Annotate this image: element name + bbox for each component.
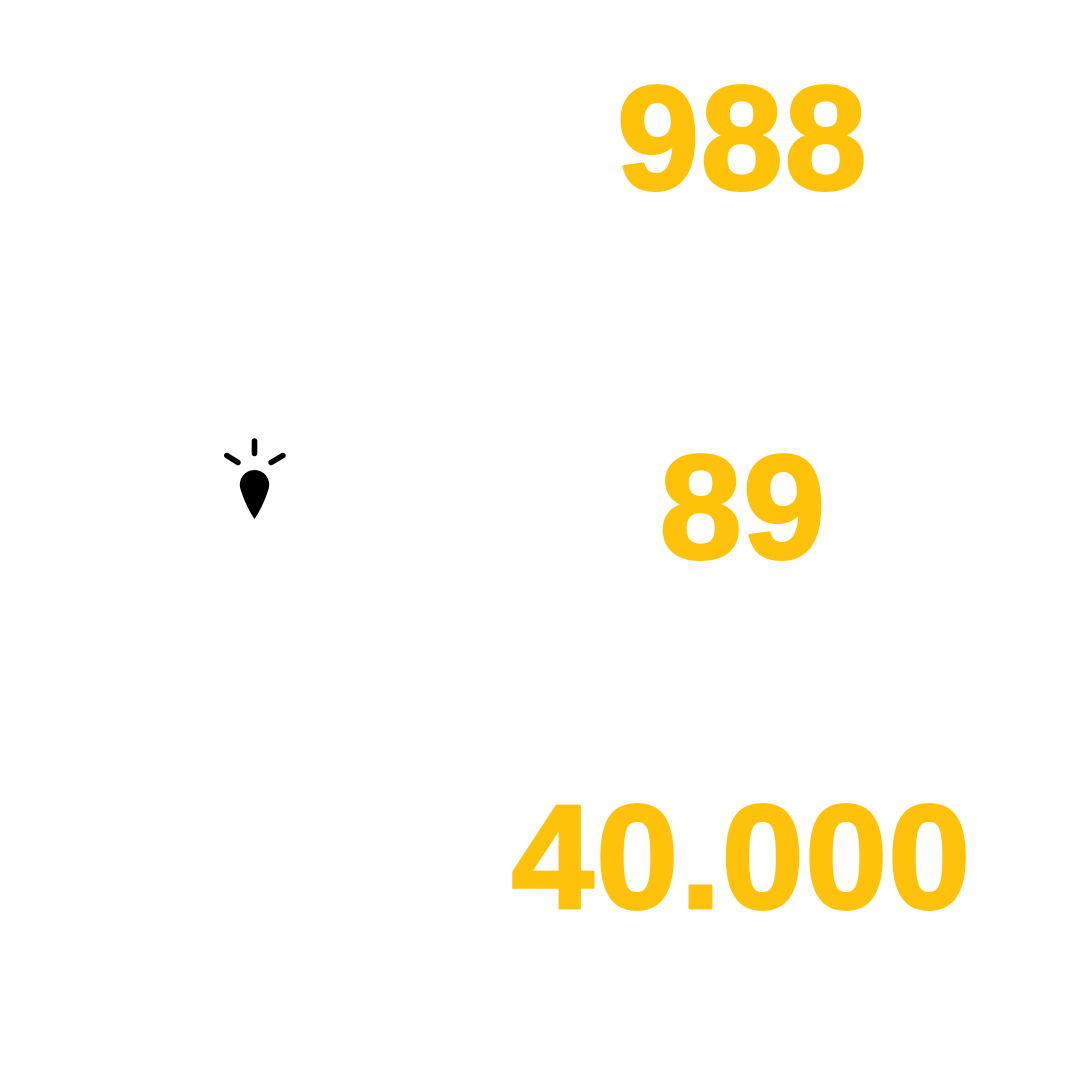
number: 988: 988 [617,56,867,221]
number: 89: 89 [660,425,825,590]
icon: light drop with rays [227,441,283,519]
number: 40.000: 40.000 [512,775,970,940]
